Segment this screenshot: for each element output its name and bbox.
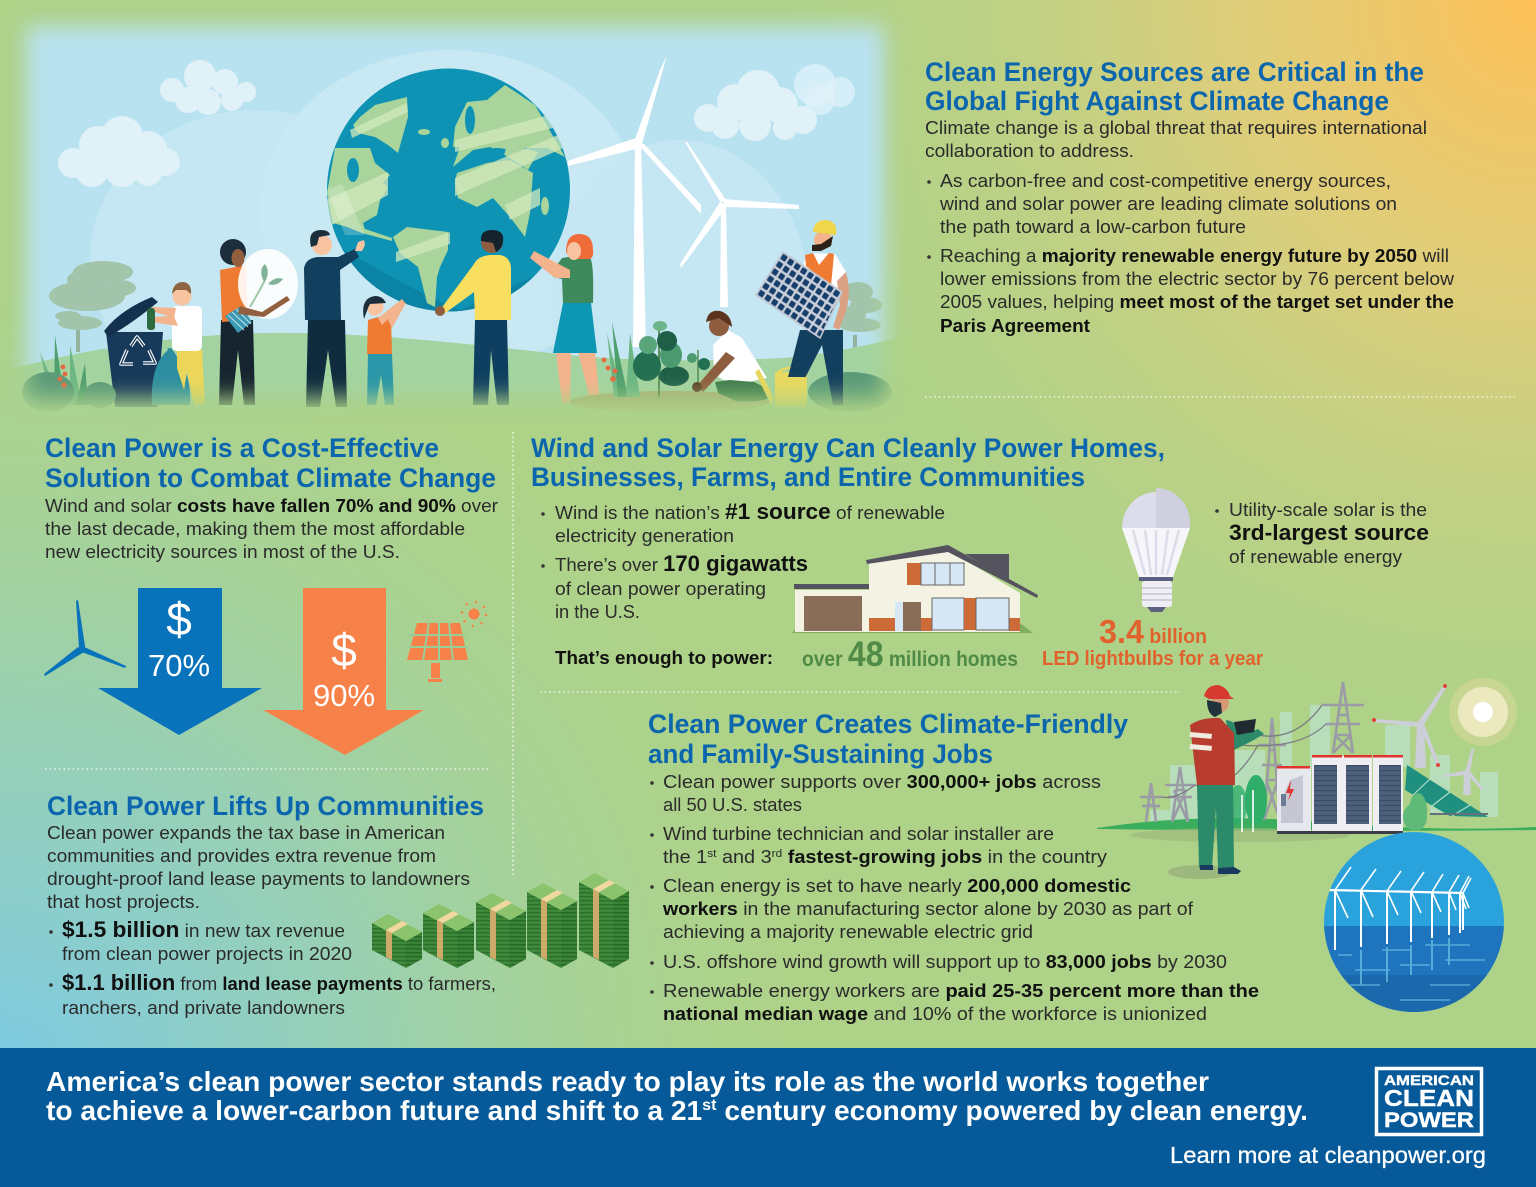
- panel: cost-effective solution: new electricity sources in most of the U.S.: [45, 541, 400, 562]
- panel: climate-friendly jobs: the 1 st and 3 rd fastest-growing jobs in the country: [663, 846, 1108, 867]
- panel: wind and solar power homes: That’s enough to power:: [555, 647, 773, 668]
- heading: family-sustaining jobs: Clean Power Creates Climate-Friendly: [648, 709, 1128, 739]
- panel: climate fight intro text: 2005 values, helping meet most of the target set under the: [940, 291, 1454, 312]
- panel: communities: [47, 791, 496, 1018]
- panel: communities: from clean power projects in 2020: [62, 943, 352, 964]
- panel: climate fight intro text: Global Fight Against Climate Change: [925, 86, 1389, 116]
- footer statement: [46, 1066, 1308, 1126]
- panel: climate-friendly jobs: workers in the manufacturing sector alone by 2030 as part of: [662, 898, 1194, 919]
- panel: climate fight intro text: As carbon-free and cost-competitive energy sources,: [940, 170, 1391, 191]
- person: gardener: [692, 311, 770, 402]
- arrow: wind cost falls 70%: [98, 588, 262, 735]
- icon: battery storage cabinets: [1277, 755, 1427, 834]
- person: boy recycling: [147, 282, 205, 405]
- panel: communities: communities and provides extra revenue from: [47, 845, 436, 866]
- heading: cost-effective: Clean Power is a Cost-Effective: [45, 433, 439, 463]
- panel: communities: that host projects.: [47, 891, 200, 912]
- panel: communities: Clean power expands the tax base in American: [47, 822, 445, 843]
- heading: lifts up communities: Clean Power Lifts Up Communities: [47, 791, 484, 821]
- arrow: solar cost falls 90%: $: [331, 624, 357, 676]
- text: utility-scale solar: Utility-scale solar is the: [1229, 499, 1427, 520]
- text: learn more: Learn more at cleanpower.org: [1170, 1142, 1486, 1168]
- panel: climate fight intro text: the path toward a low-carbon future: [940, 216, 1246, 237]
- panel: climate fight intro text: collaboration to address.: [925, 140, 1134, 161]
- panel: climate-friendly jobs: Clean energy is set to have nearly 200,000 domestic: [663, 875, 1131, 896]
- callout: 3.4 billion LED lightbulbs: [1042, 613, 1263, 670]
- panel: wind and solar power homes: in the U.S.: [555, 601, 640, 622]
- logo: American Clean Power: [1376, 1068, 1482, 1134]
- panel: climate fight intro text: lower emissions from the electric sector by 76 percent below: [940, 268, 1455, 289]
- icon: house: [792, 545, 1038, 633]
- panel: climate-friendly jobs: achieving a majority renewable electric grid: [663, 921, 1033, 942]
- icon: clouds: [58, 60, 855, 187]
- footer statement: America’s clean power sector stands ready to play its role as the world works together: [46, 1066, 1209, 1097]
- icon: solar panel and sun: [407, 602, 486, 682]
- panel: climate-friendly jobs: national median wage and 10% of the workforce is unionized: [663, 1003, 1207, 1024]
- panel: wind and solar power homes: electricity generation: [555, 525, 734, 546]
- panel: cost-effective solution: Wind and solar costs have fallen 70% and 90% over: [45, 495, 498, 516]
- arrow: solar cost falls 90%: 90%: [313, 678, 375, 713]
- panel: cost-effective solution: Solution to Combat Climate Change: [45, 463, 496, 493]
- skyline: [1150, 705, 1498, 822]
- ground strip: [1097, 818, 1536, 831]
- icon: offshore wind farm circle: [1320, 832, 1510, 1016]
- arrow: wind cost falls 70%: $: [166, 593, 192, 645]
- icon: plants: [22, 321, 892, 413]
- callout: over 48 million homes: over 48 million homes: [802, 635, 1018, 674]
- panel: climate-friendly jobs: Clean power supports over 300,000+ jobs across: [663, 771, 1101, 792]
- person: woman in green: [530, 234, 600, 403]
- icon: solar array: [1405, 765, 1488, 817]
- icon: wind turbines: [568, 55, 799, 347]
- panel: communities: $1.1 billion from land lease payments to farmers,: [62, 970, 496, 995]
- panel: climate fight intro text: Climate change is a global threat that requires international: [925, 117, 1427, 138]
- arrow: wind cost falls 70%: 70%: [148, 648, 210, 683]
- arrow: solar cost falls 90%: [263, 588, 424, 755]
- panel: cost-effective solution: the last decade, making them the most affordable: [45, 518, 465, 539]
- panel: climate fight intro text: [925, 57, 1455, 336]
- person: technician with tablet: [1190, 685, 1264, 874]
- panel: climate fight intro text: Paris Agreement: [940, 315, 1090, 336]
- text: utility-scale solar: 3rd-largest source: [1229, 520, 1429, 545]
- icon: globe: [320, 68, 570, 330]
- icon: LED lightbulb: [1122, 488, 1190, 612]
- illustration: grid, battery storage and technician: [1097, 678, 1536, 879]
- heading: cleanly power homes: Wind and Solar Energy Can Cleanly Power Homes,: [531, 433, 1165, 463]
- icon: sun: [1449, 678, 1517, 746]
- panel: wind and solar power homes: Businesses, Farms, and Entire Communities: [531, 462, 1085, 492]
- icon: trees: [1229, 775, 1427, 832]
- text: utility-scale solar: [1215, 499, 1429, 567]
- panel: climate-friendly jobs: Wind turbine technician and solar installer are: [663, 823, 1054, 844]
- panel: footer band: [0, 1048, 1536, 1187]
- person: man in navy: [304, 230, 365, 407]
- panel: communities: $1.5 billion in new tax revenue: [62, 917, 345, 942]
- person: man in yellow: [435, 230, 511, 405]
- person: woman holding lightbulb: [219, 239, 298, 405]
- panel: wind and solar power homes: of clean power operating: [555, 578, 766, 599]
- panel: communities: ranchers, and private landowners: [62, 997, 345, 1018]
- person: worker with solar panel: [756, 220, 849, 405]
- panel: climate fight intro text: wind and solar power are leading climate solutions on: [939, 193, 1397, 214]
- logo: American Clean Power: POWER: [1384, 1109, 1474, 1132]
- icon: power pylons: [1140, 682, 1364, 822]
- panel: climate fight intro text: Reaching a majority renewable energy future by 2050 will: [940, 245, 1449, 266]
- icon: wind turbine: [44, 600, 126, 676]
- callout: 3.4 billion LED lightbulbs: LED lightbulbs for a year: [1042, 648, 1263, 670]
- panel: climate-friendly jobs: Renewable energy workers are paid 25-35 percent more than the: [663, 980, 1259, 1001]
- logo: American Clean Power: AMERICAN: [1384, 1072, 1474, 1088]
- panel: wind and solar power homes: [531, 433, 1165, 668]
- callout: 3.4 billion LED lightbulbs: 3.4 billion: [1099, 613, 1207, 650]
- illustration: people holding up the globe: [12, 12, 898, 412]
- panel: climate-friendly jobs: U.S. offshore wind growth will support up to 83,000 jobs by 2030: [663, 951, 1227, 972]
- icon: recycling bin: [104, 297, 190, 407]
- icon: stacks of money: [372, 873, 629, 968]
- icon: wind turbines: [1372, 684, 1483, 795]
- panel: wind and solar power homes: There’s over 170 gigawatts: [555, 551, 808, 576]
- person: child: [363, 296, 406, 405]
- panel: climate-friendly jobs: all 50 U.S. states: [663, 794, 802, 815]
- icon: background trees: [49, 261, 882, 353]
- heading: critical in the global fight: Clean Energy Sources are Critical in the: [925, 57, 1424, 87]
- panel: wind and solar power homes: Wind is the nation’s #1 source of renewable: [555, 499, 945, 524]
- logo: American Clean Power: CLEAN: [1384, 1085, 1474, 1111]
- panel: climate-friendly jobs: and Family-Sustaining Jobs: [648, 739, 993, 769]
- ground hills: [12, 332, 898, 412]
- text: utility-scale solar: of renewable energy: [1229, 546, 1403, 567]
- panel: cost-effective solution: [45, 433, 498, 562]
- icon: watering can: [755, 368, 807, 407]
- panel: climate-friendly jobs: [648, 709, 1259, 1024]
- footer statement: to achieve a lower-carbon future and shift to a 21 st century economy powered by clean energy.: [46, 1095, 1308, 1126]
- panel: communities: drought-proof land lease payments to landowners: [47, 868, 470, 889]
